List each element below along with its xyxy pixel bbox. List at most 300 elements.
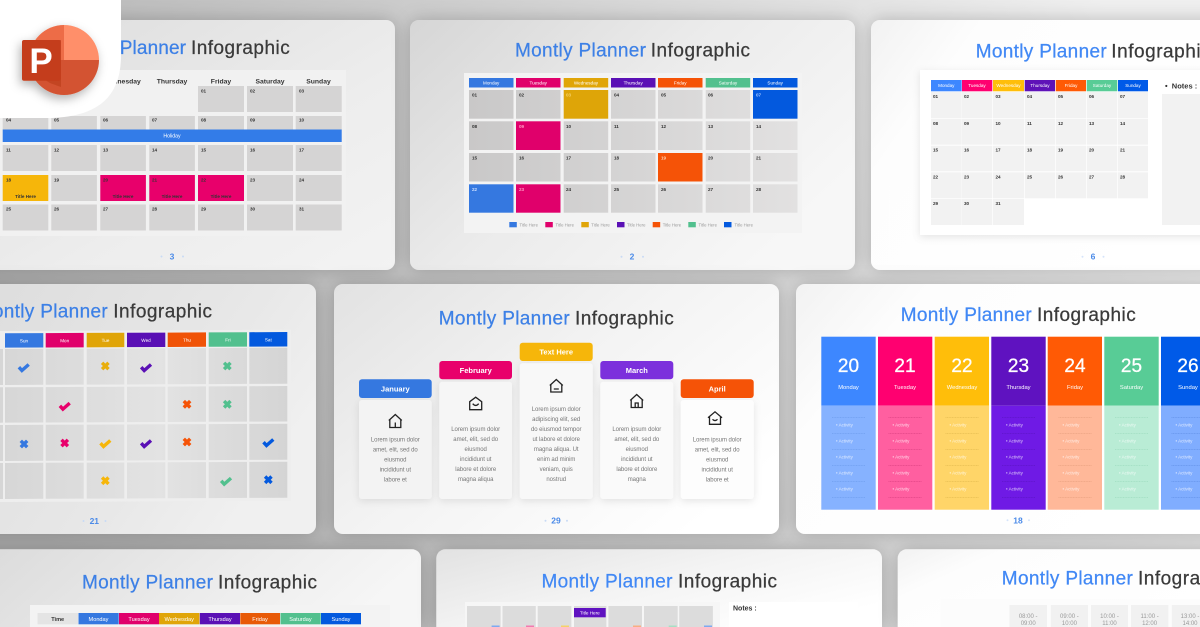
title [0,301,212,322]
calendar panel: 23 [519,187,525,192]
column: Sunday [1161,337,1200,510]
slide: colour-coded calendar [410,20,855,270]
title: Montly Planner [976,42,1107,63]
calendar panel: 10 [299,118,305,123]
calendar panel: 30 [964,201,970,206]
calendar panel: 26 [661,187,667,192]
calendar panel: 05 [661,92,667,98]
calendar panel: 04 [1027,94,1033,99]
slide: monthly cards [334,284,779,534]
calendar panel: 01 [201,88,207,94]
card: March: amet, elit, sed do [614,437,660,443]
card: April: Lorem ipsum dolor [693,438,742,444]
calendar panel: Wednesday [103,78,141,86]
title: Infographic [575,308,674,329]
column: Thursday: • Activity [1006,439,1024,444]
card: March: labore et dolore [616,467,658,473]
column: Monday: 20 [838,356,859,377]
calendar panel: Monday [483,80,500,86]
calendar panel: 14 [152,148,158,153]
page number [544,516,568,526]
legend: Title Here [627,223,646,228]
page number [620,252,644,262]
column: Saturday: • Activity [1119,471,1137,476]
title [439,308,674,329]
card: Text Here: ut labore et dolore [532,437,581,443]
calendar panel: 30 [250,207,256,212]
card: January: amet, elit, sed do [373,448,418,454]
calendar panel: 23 [250,177,256,182]
calendar panel: 08 [472,124,478,129]
table: Sat [265,337,272,342]
calendar panel: Saturday [255,78,285,86]
holiday bar: Holiday [163,134,181,140]
card: February: magna aliqua [458,477,494,483]
card: April: labore et [706,478,729,484]
title: Planner [120,38,187,59]
column: Tuesday [878,337,932,510]
column: Monday: • Activity [836,439,854,444]
calendar panel: 24 [566,187,572,192]
calendar panel: 07 [152,118,158,123]
card: February: amet, elit, sed do [453,437,499,443]
calendar panel: Sunday [767,80,784,86]
time slot panel: 10:00 [1062,621,1078,627]
calendar panel: 15 [933,148,939,153]
calendar panel [920,70,1200,235]
column: Friday: • Activity [1062,455,1080,460]
calendar panel: Saturday [1093,83,1112,88]
card: March: Lorem ipsum dolor [612,427,661,433]
page number: 21 [90,516,99,526]
card: January: labore et [384,478,407,484]
calendar panel: 12 [661,124,667,129]
icon: house [630,394,643,408]
column: Sunday: Sunday [1178,385,1198,391]
column: Saturday: • Activity [1119,423,1137,428]
column: Monday: • Activity [836,487,854,492]
icon: house with dash [550,380,563,392]
column: Friday: • Activity [1062,439,1080,444]
card: Text Here: nostrud [546,477,566,483]
card: January [359,379,432,499]
title [976,42,1200,63]
calendar panel: Title Here [211,194,232,199]
calendar panel: 31 [996,201,1001,206]
calendar panel: 09 [250,118,256,123]
calendar panel: Sunday [1125,83,1141,88]
page number [82,516,106,526]
calendar panel: 13 [1089,121,1095,126]
card: Text Here [520,343,593,499]
title [82,572,317,593]
calendar panel: 13 [103,148,109,153]
column: Tuesday: • Activity [892,439,910,444]
column: Monday: Monday [838,385,859,391]
column: Wednesday: 22 [951,356,973,377]
calendar panel [0,70,346,236]
column: Monday: • Activity [836,471,854,476]
time slot panel: 10:00 - [1100,614,1119,620]
column: Sunday: • Activity [1176,487,1193,492]
check and cross marks [19,363,273,484]
title [901,305,1136,326]
calendar panel: 25 [6,207,12,212]
calendar panel: 12 [1058,121,1064,126]
calendar panel: 15 [201,148,207,153]
calendar panel: 01 [472,92,478,98]
calendar panel: 15 [472,155,478,160]
time slot panel: 11:00 - [1140,614,1159,620]
card: March: March [626,366,648,375]
card: April: eiusmod [706,458,728,464]
legend: Title Here [663,223,682,228]
column: Monday: • Activity [836,455,854,460]
icon: PowerPoint logo: P [29,42,53,81]
title [120,38,290,59]
calendar panel: Wednesday [574,80,599,86]
card: April: April [709,384,726,393]
slide: check and cross table [0,284,316,534]
calendar panel [464,73,802,233]
calendar panel: 19 [1058,148,1064,153]
calendar panel: 03 [299,88,305,94]
card: February: eiusmod [465,447,487,453]
column: Tuesday: • Activity [892,487,910,492]
page number: 3 [170,252,175,262]
page number [1006,515,1030,525]
title: Infographic [218,572,317,593]
column: Thursday [991,337,1046,510]
icon: house with smile [708,412,722,424]
legend: Title Here [698,223,718,228]
legend: Title Here [591,223,610,228]
table: Tue [102,338,110,343]
column: Friday: • Activity [1062,423,1080,428]
calendar panel: 06 [708,92,714,98]
calendar panel: Tuesday [529,80,548,86]
calendar panel: 03 [996,94,1001,99]
calendar panel: 16 [250,148,256,153]
calendar panel: 28 [1120,174,1126,180]
title: Infographic [1037,305,1136,326]
table panel: Sunday [332,617,351,623]
table panel: Monday [89,617,109,623]
time slot panel: 12:00 [1142,621,1158,627]
column: Tuesday: 21 [894,356,916,377]
calendar panel: 20 [1089,148,1095,153]
legend: Title Here [734,223,754,228]
calendar panel: Saturday [719,80,738,86]
card: January: incididunt ut [380,468,411,474]
column: Wednesday: • Activity [950,423,967,428]
calendar panel: 11 [614,124,619,129]
calendar panel: 21 [1120,148,1126,153]
calendar panel: 27 [708,187,714,192]
column: Saturday: Saturday [1120,385,1143,391]
calendar panel: Friday [211,78,231,86]
column: Tuesday: • Activity [892,471,910,476]
legend [509,222,754,228]
page number [160,252,184,262]
table panel [30,605,390,627]
calendar panel: 28 [152,207,158,212]
calendar panel [465,602,720,627]
calendar panel: Monday [938,83,955,88]
calendar panel: 26 [1058,174,1064,180]
time slot panel: 09:00 [1021,621,1036,627]
time slot panel: 11:00 [1102,621,1117,627]
calendar panel: 18 [6,177,12,182]
calendar panel: 02 [519,92,525,98]
legend: Title Here [556,223,575,228]
column: Monday [821,337,876,510]
calendar panel: Thursday [624,80,643,86]
calendar panel: 08 [933,121,939,126]
title [515,40,750,61]
calendar panel: 16 [964,148,970,153]
notes: Notes : [733,606,757,612]
card: January: Lorem ipsum dolor [371,438,420,444]
time slot panel: 13:00 - [1181,614,1199,620]
calendar panel: 11 [1027,121,1032,126]
table panel: Wednesday [164,617,194,623]
column: Thursday: • Activity [1006,455,1024,460]
page number: 2 [630,252,635,262]
calendar panel: 25 [614,187,620,192]
slide: time slots [898,549,1200,627]
calendar panel: 20 [708,155,714,160]
calendar panel: 14 [1120,121,1126,126]
calendar panel: 18 [614,155,620,160]
title: Montly Planner [82,572,214,593]
calendar panel: 01 [933,94,939,99]
time slot panel: 08:00 - [1019,614,1038,620]
calendar panel: 05 [54,118,60,123]
title [542,571,777,592]
calendar panel: 24 [299,177,305,182]
notes [729,602,858,627]
calendar panel: 26 [54,207,60,212]
column: Sunday: • Activity [1176,471,1193,476]
calendar panel: Wednesday [996,83,1021,88]
calendar panel: 14 [756,124,762,129]
column: Monday: • Activity [836,423,854,428]
calendar panel: 24 [996,174,1001,180]
calendar panel: 23 [964,174,970,180]
column: Thursday: 23 [1008,356,1029,377]
table: Mon [60,338,70,343]
calendar panel: 04 [6,118,12,123]
page number [1082,252,1104,262]
column: Friday: 24 [1064,356,1086,377]
holiday bar [3,130,342,142]
calendar panel: 07 [1120,94,1126,99]
table panel: Saturday [289,617,312,623]
column: Wednesday: • Activity [950,439,967,444]
card: February: February [460,366,493,375]
calendar panel: 21 [152,177,158,182]
card: March: incididunt ut [621,457,653,463]
time slot panel: 14:00 [1182,621,1198,627]
column: Wednesday: Wednesday [947,385,977,391]
calendar panel: 17 [299,148,305,153]
title: Infographic [113,301,212,322]
calendar panel: 19 [661,155,667,160]
column: Friday [1048,337,1102,510]
column: Wednesday: • Activity [950,471,967,476]
column: Wednesday [935,337,989,510]
calendar panel: 27 [103,207,109,212]
card: Text Here: adipiscing elit, sed [532,417,580,423]
card: January: eiusmod [384,458,406,464]
calendar panel: Friday [674,80,687,86]
calendar panel: 21 [756,155,762,160]
calendar panel: 04 [614,92,620,98]
title: Montly Planner [515,40,647,61]
card: Text Here: enim ad minim [537,457,575,463]
calendar panel: 17 [566,155,572,160]
calendar panel: 07 [756,92,762,98]
calendar panel: 16 [519,155,525,160]
card: March: eiusmod [626,447,648,453]
notes: • Notes : [1165,82,1197,90]
calendar panel: 03 [566,92,572,98]
calendar panel: 12 [54,148,60,153]
column: Saturday [1104,337,1159,510]
calendar panel: 20 [103,177,109,182]
table panel: Friday [252,617,268,623]
column: Tuesday: Tuesday [894,385,916,391]
title: Infographic [678,571,777,592]
calendar panel: 05 [1058,94,1064,99]
table: Thu [183,338,191,343]
calendar panel: 10 [996,121,1001,126]
card: March: magna [628,477,647,483]
title [1002,568,1200,589]
card: Text Here: Lorem ipsum dolor [532,407,581,413]
icon: house with smile [470,397,482,410]
title: Infographic [651,40,750,61]
time slot panel: 09:00 - [1060,614,1079,620]
calendar panel: 25 [1027,174,1033,180]
calendar panel: Tuesday [968,83,986,88]
calendar panel: 09 [964,121,970,126]
calendar panel: Thursday [1030,83,1050,88]
column: Friday: • Activity [1062,471,1080,476]
calendar panel: 02 [964,94,970,99]
card: February: labore et dolore [455,467,497,473]
title: Montly Planner [901,305,1032,326]
calendar panel: 29 [201,207,207,212]
slide: calendar events with notes [436,549,882,627]
calendar panel: Sunday [306,78,331,86]
page number: 6 [1091,252,1096,262]
card: Text Here: Text Here [539,348,573,357]
column: Thursday: • Activity [1006,487,1024,492]
column: Tuesday: • Activity [892,423,910,428]
event chip: Title Here [580,610,600,615]
calendar panel: 22 [472,187,478,192]
calendar panel: 06 [1089,94,1095,99]
table [0,330,291,502]
calendar panel: 19 [54,177,60,182]
title: Montly Planner [542,571,673,592]
notes [1162,82,1200,225]
column: Sunday: • Activity [1176,439,1193,444]
calendar panel: 18 [1027,148,1033,153]
table: Fri [225,337,231,343]
card: March [600,361,673,499]
calendar panel: 10 [566,124,572,129]
card: April: incididunt ut [702,468,733,474]
calendar panel: 31 [299,207,305,212]
column: Sunday: 26 [1177,356,1199,377]
column: Saturday: • Activity [1119,487,1137,492]
calendar panel: 08 [201,118,207,123]
page number: 18 [1013,515,1023,525]
column: Saturday: • Activity [1119,439,1137,444]
calendar panel: 22 [201,177,207,182]
table panel: Tuesday [128,617,150,623]
card: Text Here: magna aliqua. Ut [534,447,579,453]
slide: calendar with holiday [0,20,395,270]
calendar panel: 13 [708,124,714,129]
title: Infographic [191,38,290,59]
card: February: incididunt ut [460,457,492,463]
calendar panel: 09 [519,124,525,129]
column: Thursday: Thursday [1006,385,1031,391]
column: Sunday: • Activity [1176,423,1193,428]
card: April [681,379,754,499]
calendar panel: 17 [996,148,1001,153]
card: Text Here: veniam, quis [540,467,573,473]
slide: weekly activity columns [796,284,1200,534]
table: Wed [141,338,151,343]
column: Thursday: • Activity [1006,423,1024,428]
page number: 29 [551,516,561,526]
title: Montly Planner [439,308,570,329]
column: Thursday: • Activity [1006,471,1024,476]
calendar panel: 06 [103,118,109,123]
table: Sun [20,338,29,343]
calendar panel: Title Here [15,194,36,199]
card: February: Lorem ipsum dolor [451,427,500,433]
icon: house [389,414,402,428]
card: Text Here: do eiusmod tempor [531,427,582,433]
slide: time table [0,549,421,627]
calendar panel: Title Here [113,194,134,199]
card: April: amet, elit, sed do [695,448,740,454]
card: February [439,361,512,499]
column: Friday: • Activity [1062,487,1080,492]
column: Wednesday: • Activity [950,455,967,460]
calendar panel: 22 [933,174,939,180]
time slot panel [941,599,1200,627]
column: Friday: Friday [1067,385,1083,391]
calendar panel: 02 [250,88,256,94]
column: Tuesday: • Activity [892,455,910,460]
calendar panel: 28 [756,187,762,192]
column: Sunday: • Activity [1176,455,1193,460]
legend: Title Here [520,223,539,228]
logo badge: PowerPoint [0,0,121,118]
column: Wednesday: • Activity [950,487,967,492]
slide: calendar with notes [871,20,1200,270]
title: Montly Planner [1002,568,1133,589]
column: Saturday: • Activity [1119,455,1137,460]
calendar panel: 29 [933,201,939,206]
